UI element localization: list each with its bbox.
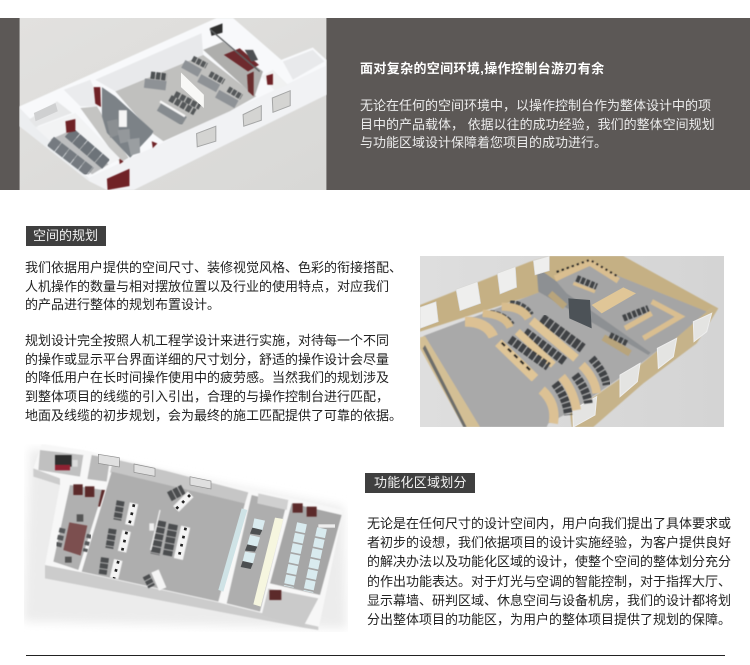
back wall windows xyxy=(420,256,549,328)
straight desk rows centre xyxy=(498,318,583,378)
projection screen xyxy=(181,72,204,108)
text: planning paragraph one: 人机操作的数量与相对摆放位置以及行业的使用特点，对应我们 xyxy=(25,276,389,295)
image: grey functional zone floor plan xyxy=(24,449,347,630)
text: functional zoning paragraph: 分出整体项目的功能区，为用户的整体项目提供了规划的保障。 xyxy=(367,609,731,628)
exterior windows xyxy=(197,91,290,147)
text: functional zoning paragraph xyxy=(367,513,731,628)
text: functional zoning paragraph: 显示幕墙、研判区域、休息空间与设备机房，我们的设计都将划 xyxy=(367,590,731,609)
display wall strip xyxy=(218,508,247,592)
text: functional zoning paragraph: 的作出功能表达。对于灯光与空调的智能控制，对于指挥大厅、 xyxy=(367,571,731,590)
banner body text xyxy=(360,95,715,150)
section label: functional zoning xyxy=(365,473,475,493)
text: planning paragraph one: 我们依据用户提供的空间尺寸、装修视觉风格、色彩的衔接搭配、 xyxy=(25,260,402,275)
server rack rows xyxy=(50,132,106,172)
cluster desks in main room xyxy=(103,489,191,589)
front wall windows xyxy=(573,313,712,427)
banner body text: 与功能区域设计保障着您项目的成功进行。 xyxy=(360,135,607,150)
small room equipment xyxy=(34,103,58,121)
front-right wall xyxy=(570,307,718,427)
banner heading: 面对复杂的空间环境,操作控制台游刃有余 xyxy=(360,61,604,76)
text: planning paragraph two: 地面及线缆的初步规划，会为最终的施工匹配提供了可靠的依据。 xyxy=(25,405,402,424)
meeting table xyxy=(592,287,636,313)
text: planning paragraph two: 的操作或显示平台界面详细的尺寸划分，舒适的操作设计会尽量 xyxy=(25,349,389,368)
text: functional zoning paragraph: 者初步的设想，我们依据项目的设计实施经验，为客户提供良好 xyxy=(367,532,731,551)
image: sand-walled control room xyxy=(420,256,724,427)
left wall xyxy=(420,336,480,427)
glass partition xyxy=(537,270,653,355)
text: planning paragraph two: 规划设计完全按照人机工程学设计来进行实施，对待每一个不同 xyxy=(25,330,389,349)
back-left wall xyxy=(420,256,718,332)
glass room desks xyxy=(550,260,680,353)
centre console and screens xyxy=(241,518,283,607)
section label: functional zoning: 功能化区域划分 xyxy=(374,475,467,490)
glass room display wall xyxy=(568,298,592,328)
floor xyxy=(423,263,707,427)
text: functional zoning paragraph: 无论是在任何尺寸的设计空间内，用户向我们提出了具体要求或 xyxy=(367,513,731,532)
curved desk group front xyxy=(542,358,607,423)
text: planning paragraph one xyxy=(25,260,402,312)
black desk dots xyxy=(114,495,190,578)
partition wall and server racks xyxy=(102,87,153,158)
small room equipment xyxy=(55,455,78,470)
text: planning paragraph two xyxy=(25,330,402,424)
section label: space planning: 空间的规划 xyxy=(33,228,98,243)
meeting table xyxy=(58,514,89,563)
red doors xyxy=(65,74,273,190)
panel: top banner xyxy=(0,18,750,190)
equipment room rack rows xyxy=(289,523,322,592)
workstation desks xyxy=(144,59,241,121)
red doors xyxy=(73,484,317,600)
text: planning paragraph one: 的产品进行整体的规划布置设计。 xyxy=(25,297,220,312)
back wall windows xyxy=(98,454,211,489)
image: grey office floor plan xyxy=(19,18,327,190)
curved desk group left xyxy=(465,303,531,337)
banner body text: 目中的产品载体， 依据以往的成功经验，我们的整体空间规划 xyxy=(360,114,715,133)
banner body text: 无论在任何的空间环境中，以操作控制台作为整体设计中的项 xyxy=(360,95,711,114)
text: functional zoning paragraph: 的解决办法以及功能化区域的设计，使整个空间的整体划分充分 xyxy=(367,551,731,570)
meeting table and wall display xyxy=(210,23,260,96)
section label: space planning xyxy=(26,226,106,246)
text: planning paragraph two: 的降低用户在长时间操作使用中的疲劳感。当然我们的规划涉及 xyxy=(25,370,389,385)
text: planning paragraph two: 到整体项目的线缆的引入引出，合理的与操作控制台进行匹配， xyxy=(25,386,389,405)
